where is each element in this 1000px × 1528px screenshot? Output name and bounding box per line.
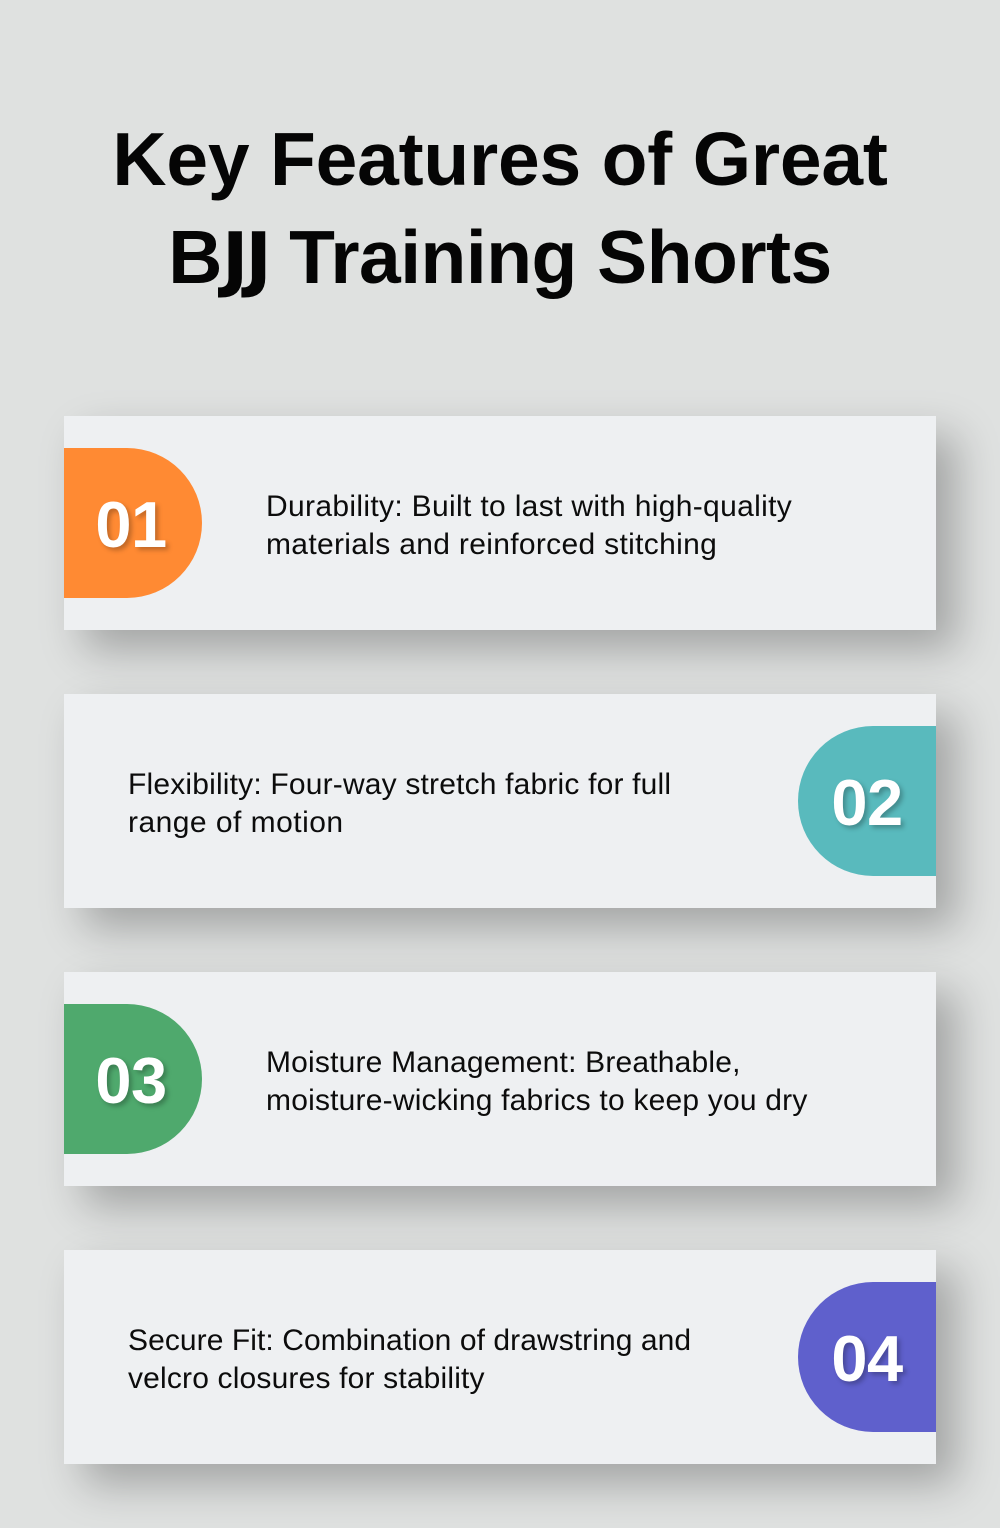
text: secure fit: velcro closures for stability (128, 1362, 485, 1395)
text: durability (266, 490, 792, 561)
text: flexibility: range of motion (128, 806, 344, 839)
badge: 01 (64, 448, 202, 598)
badge: 01: 01 (95, 488, 167, 561)
badge: 04 (798, 1282, 936, 1432)
panel: feature 02 flexibility (64, 694, 936, 908)
title: BJJ Training Shorts (168, 215, 832, 300)
text: moisture management: moisture-wicking fabrics to keep you dry (266, 1084, 808, 1117)
title (112, 117, 888, 300)
text: durability: materials and reinforced stitching (266, 528, 717, 561)
text: flexibility: Flexibility: Four-way stretch fabric for full (128, 768, 671, 801)
text: flexibility (128, 768, 671, 839)
badge: 02 (798, 726, 936, 876)
text: moisture management: Moisture Management: Breathable, (266, 1046, 741, 1079)
text: durability: Durability: Built to last with high-quality (266, 490, 792, 523)
badge: 03: 03 (95, 1044, 167, 1117)
text: moisture management (266, 1046, 808, 1117)
text: secure fit (128, 1324, 691, 1395)
panel: feature 03 moisture management (64, 972, 936, 1186)
badge: 02: 02 (831, 766, 903, 839)
panel: feature 04 secure fit (64, 1250, 936, 1464)
panel: feature 01 durability (64, 416, 936, 630)
badge: 04: 04 (831, 1322, 903, 1395)
title: Key Features of Great (112, 117, 888, 201)
text: secure fit: Secure Fit: Combination of drawstring and (128, 1324, 691, 1357)
badge: 03 (64, 1004, 202, 1154)
